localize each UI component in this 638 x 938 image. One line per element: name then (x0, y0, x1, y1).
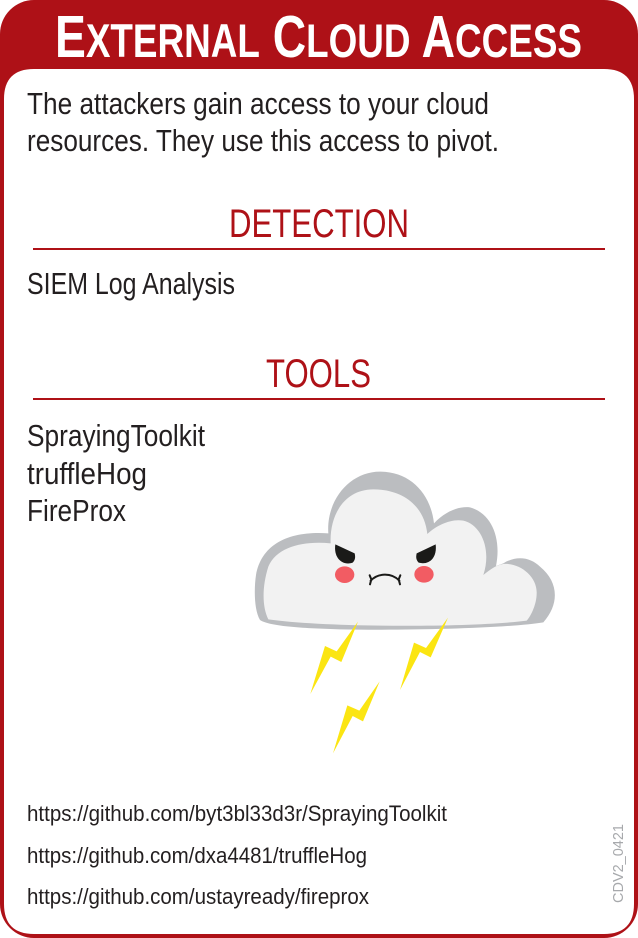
cloud body (264, 489, 537, 626)
version code: CDV2_0421 (610, 824, 627, 903)
heading: detection: DETECTION (229, 202, 409, 246)
detection text: SIEM Log Analysis (27, 266, 235, 301)
tools list (27, 418, 205, 528)
lightning bolt bottom (333, 681, 380, 753)
icon: angry storm cloud (255, 472, 555, 753)
reference links: https://github.com/ustayready/fireprox (27, 884, 370, 909)
lightning bolt left (310, 622, 358, 694)
intro text: The attackers gain access to your cloud (27, 86, 489, 121)
right eye (416, 544, 436, 563)
intro text: resources. They use this access to pivot. (27, 123, 499, 158)
heading: tools: TOOLS (266, 352, 371, 396)
reference links (27, 801, 448, 909)
tools list: truffleHog (27, 456, 147, 491)
reference links: https://github.com/byt3bl33d3r/SprayingToolkit (27, 801, 448, 826)
intro text (27, 86, 499, 158)
tools list: SprayingToolkit (27, 418, 205, 453)
left cheek (335, 566, 354, 583)
tools list: FireProx (27, 493, 126, 528)
lightning bolt right (400, 618, 448, 690)
left eye (335, 544, 355, 563)
title: EXTERNAL CLOUD ACCESS (55, 4, 582, 70)
cloud shadow (255, 472, 555, 630)
mouth (370, 575, 400, 584)
reference links: https://github.com/dxa4481/truffleHog (27, 843, 367, 868)
right cheek (414, 566, 434, 583)
